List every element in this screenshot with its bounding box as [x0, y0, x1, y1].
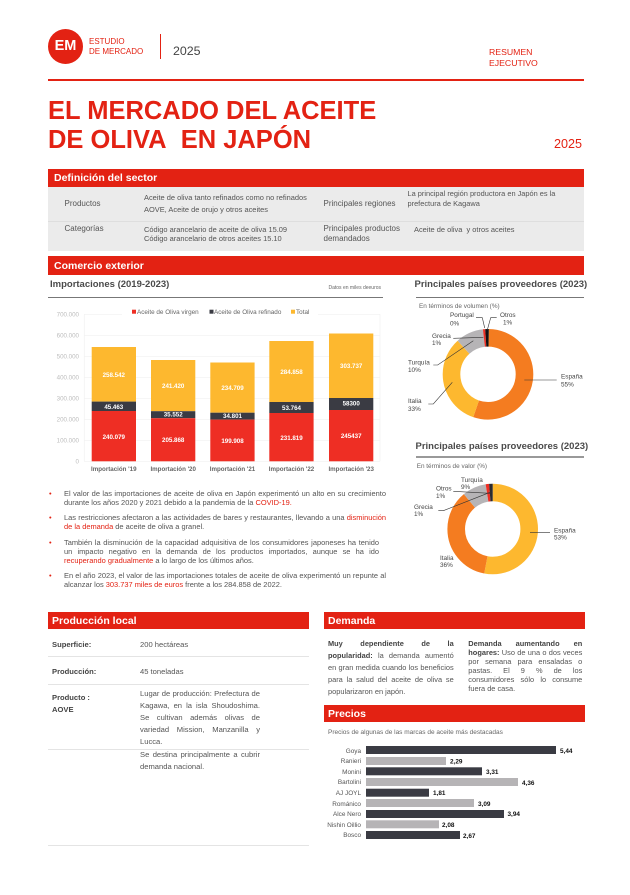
bullet 4: En el año 2023, el valor de las importaciones totales de aceite de oliva experimentó un repunte al alcanzar los 303.737 miles de euros frente a los 284.858 de 2022. [64, 571, 386, 589]
text: producto: Lugar de producción: Prefectura de Kagawa, en la isla Shoudoshima. Se cultivan además olivas de variedad Mission, Manzanilla y Lucca. [140, 689, 260, 746]
bar values: 34.801 [223, 413, 243, 420]
bar values: 240.079 [103, 434, 126, 441]
text: productos: AOVE, Aceite de orujo y otros aceites [144, 204, 268, 214]
row: producto label: Producto : [52, 693, 90, 702]
bar values: 53.764 [282, 405, 302, 412]
donut labels: volumen: España [561, 373, 583, 380]
text: precios subtítulo: Precios de algunas de las marcas de aceite más destacadas [328, 729, 503, 736]
donut labels: volumen: Portugal [450, 312, 474, 319]
bar values: 35.552 [164, 412, 183, 418]
bullet 3: un impacto negativo en la demanda de los productos importados, aunque se ha ido [64, 547, 379, 556]
logo text: ESTUDIO [89, 37, 125, 46]
legend: Aceite de Oliva virgen [137, 309, 199, 316]
panel: demanda [324, 612, 585, 696]
text: productos: Aceite de oliva tanto refinados como no refinados [144, 193, 307, 202]
text: regiones: prefectura de Kagawa [408, 199, 480, 208]
category labels: Importación '22 [269, 466, 315, 473]
y axis labels: 700.000 [57, 312, 80, 318]
donut chart: volumen [408, 303, 583, 420]
brand labels: Bosco [343, 832, 361, 839]
text: categorías: Código arancelario de aceite de oliva 15.09 [144, 225, 287, 234]
bullet list: • [49, 538, 52, 547]
brand labels [327, 748, 361, 839]
title: EL MERCADO DEL ACEITE [48, 97, 376, 125]
donut labels: volumen: 55% [561, 381, 574, 388]
heading: importaciones: Importaciones (2019-2023) [50, 279, 169, 290]
logo text [89, 37, 143, 56]
title year: 2025 [554, 137, 582, 151]
donut labels: valor: Turquía [461, 477, 483, 484]
donut labels: valor [414, 463, 576, 569]
brand labels: Monini [342, 769, 361, 776]
brand labels: Nishin Oillio [327, 822, 361, 829]
row: producción [52, 667, 184, 676]
price values: 5,44 [560, 748, 573, 755]
row: principales productos demandados [324, 224, 400, 243]
donut labels: volumen: 33% [408, 406, 421, 413]
heading: producción local [48, 612, 309, 629]
donut labels: valor: En términos de valor (%) [417, 463, 487, 470]
leader lines: valor [438, 491, 550, 532]
price values [433, 748, 573, 840]
bullet list: • [49, 513, 52, 522]
price values: 2,08 [442, 822, 455, 829]
heading: proveedores volumen: Principales países proveedores (2023) [414, 279, 587, 290]
price values: 4,36 [522, 780, 535, 787]
panel: definición del sector [48, 169, 584, 251]
bars: 2023 [329, 334, 373, 461]
category labels: Importación '20 [150, 466, 196, 473]
bars: 2019 [92, 347, 136, 461]
row: superficie: 200 hectáreas [140, 640, 188, 649]
y axis labels [57, 312, 80, 466]
donut labels: valor: 9% [461, 484, 471, 491]
text: productos demandados: Aceite de oliva y otros aceites [414, 225, 514, 234]
text: destino: Se destina principalmente a cubrir demanda nacional. [140, 750, 260, 771]
bar chart: precios [327, 746, 573, 840]
note: unidades: Datos en miles deeuros [328, 284, 381, 290]
bars: 2020 [151, 360, 195, 461]
legend: Aceite de Oliva refinado [214, 309, 282, 316]
bullet 3: recuperando gradualmente a lo largo de los últimos años. [64, 556, 254, 565]
text: hogares: Demanda aumentando en hogares: Uso de una o dos veces por semana para ensaladas o pastas. El 9 % de los consumidores sólo lo consume fuera de casa. [468, 639, 582, 693]
bar values: 231.819 [280, 435, 303, 442]
logo text: DE MERCADO [89, 47, 143, 56]
heading: demanda [324, 612, 585, 629]
donut labels: valor: Italia [440, 555, 454, 562]
row: producción: 45 toneladas [140, 667, 184, 676]
text: regiones [408, 189, 556, 208]
heading: precios: Precios [328, 708, 366, 720]
y axis labels: 200.000 [57, 416, 80, 424]
bullet list [49, 489, 386, 589]
text: categorías [144, 225, 287, 243]
bullet 3: También la disminución de la capacidad adquisitiva de los consumidores japoneses ha tenido [64, 538, 379, 547]
bars: 2022 [269, 341, 314, 461]
report type [489, 47, 538, 68]
legend [132, 309, 309, 316]
category labels [91, 466, 374, 473]
bullet list: • [49, 571, 52, 580]
brand labels: Alce Nero [333, 811, 361, 818]
heading: definición del sector: Definición del sector [54, 172, 157, 184]
bar values: 234.709 [221, 385, 244, 392]
price values: 3,94 [508, 811, 520, 818]
legend: Total [296, 309, 309, 316]
bars: 2021 [210, 362, 255, 461]
report type: RESUMEN [489, 47, 532, 57]
donut labels: volumen: 1% [503, 319, 513, 326]
brand labels: Románico [332, 801, 361, 808]
donut labels: volumen: Italia [408, 398, 422, 405]
y axis labels: 300.000 [57, 396, 80, 402]
category labels: Importación '19 [91, 466, 137, 473]
row: principales productos demandados: Principales productos [324, 224, 400, 233]
bar values: 284.858 [280, 369, 303, 376]
text: regiones: La principal región productora en Japón es la [408, 189, 555, 198]
donut labels: valor: 53% [554, 534, 567, 541]
bar values [103, 363, 363, 445]
bullet 3 [49, 538, 379, 565]
y axis labels: 600.000 [57, 332, 80, 340]
y axis labels: 500.000 [57, 354, 80, 360]
price values: 3,09 [478, 801, 491, 808]
donut labels: valor: Otros [436, 485, 452, 492]
bar values: 245437 [341, 433, 362, 440]
bar values: 241.420 [162, 383, 185, 390]
price values: 2,29 [450, 758, 463, 766]
brand labels: Ranieri [341, 758, 361, 765]
price bars [366, 746, 556, 839]
category labels: Importación '21 [210, 466, 256, 473]
bar values: 199.908 [221, 438, 244, 445]
row: productos: Productos [64, 199, 101, 208]
donut labels: volumen: 0% [450, 320, 460, 327]
price values: 1,81 [433, 790, 446, 797]
title [48, 97, 376, 154]
row: producto label [52, 693, 90, 714]
bar values: 205.868 [162, 437, 185, 444]
donut labels: volumen: 1% [432, 340, 442, 347]
brand labels: Bartolini [338, 779, 361, 786]
row: categorías: Categorías [64, 224, 104, 232]
donut labels: valor: 1% [436, 493, 446, 500]
bullet 2: Las restricciones afectaron a las actividades de bares y restaurantes, llevando a una disminución de la demanda de aceite de oliva a granel. [64, 513, 386, 531]
price values: 2,67 [463, 833, 476, 840]
donut labels: valor: España [554, 527, 576, 534]
y axis labels: 400.000 [57, 374, 80, 382]
row: principales regiones: Principales regiones [324, 199, 396, 208]
donut labels: valor: 36% [440, 562, 453, 569]
price values: 3,31 [486, 769, 499, 776]
bar chart: importaciones [56, 309, 380, 473]
heading: definición del sector [48, 169, 584, 187]
donut labels: valor: Grecia [414, 504, 433, 511]
y axis labels: 0 [76, 458, 80, 466]
title: DE OLIVA EN JAPÓN [48, 126, 311, 154]
row: principales productos demandados: demandados [324, 234, 370, 243]
row: superficie [52, 640, 188, 649]
brand labels: Goya [346, 748, 361, 755]
header [48, 29, 538, 68]
donut chart: valor [414, 463, 576, 574]
text: productos [144, 193, 307, 214]
row: superficie: Superficie: [52, 640, 91, 649]
heading: precios [324, 705, 585, 722]
logo circle: EM [55, 38, 76, 54]
leader lines: volumen [428, 318, 557, 404]
donut labels: volumen: Turquía [408, 359, 430, 366]
panel: producción local [48, 612, 309, 846]
bar values: 303.737 [340, 363, 363, 370]
bar values: 45.463 [104, 404, 124, 411]
heading: demanda: Demanda [328, 615, 375, 627]
donut labels: volumen [408, 303, 583, 413]
donut labels: valor: 1% [414, 511, 424, 518]
donut labels: volumen: Grecia [432, 333, 451, 340]
row: producto label: AOVE [52, 705, 74, 714]
bullet list: • [49, 489, 52, 498]
heading: producción local: Producción local [52, 615, 137, 627]
donut rings: valor [456, 492, 529, 566]
y axis labels: 100.000 [57, 438, 80, 444]
category labels: Importación '23 [328, 466, 374, 473]
brand labels: AJ JOYL [336, 790, 361, 797]
text: categorías: Código arancelario de otros aceites 15.10 [144, 234, 282, 243]
text: popularidad: Muy dependiente de la popularidad: la demanda aumentó en gran medida cuando los beneficios para la salud del aceite de oliva se popularizaron en japón. [328, 639, 454, 696]
report type: EJECUTIVO [489, 58, 538, 68]
bar values: 258.542 [103, 372, 126, 379]
heading: comercio exterior: Comercio exterior [54, 260, 144, 272]
header year: 2025 [173, 44, 201, 58]
heading: comercio exterior [48, 256, 584, 275]
bullet 1: El valor de las importaciones de aceite de oliva en Japón experimentó un alto en su crecimiento durante los años 2020 y 2021 debido a la pandemia de la COVID-19. [64, 489, 386, 507]
heading: proveedores valor: Principales países proveedores (2023) [416, 440, 588, 452]
donut labels: volumen: Otros [500, 312, 516, 319]
logo circle [48, 29, 83, 64]
row: producción: Producción: [52, 667, 96, 676]
donut rings: volumen [452, 338, 524, 411]
donut labels: volumen: 10% [408, 367, 421, 374]
donut labels: volumen: En términos de volumen (%) [419, 303, 500, 310]
bar values: 58300 [343, 400, 360, 408]
